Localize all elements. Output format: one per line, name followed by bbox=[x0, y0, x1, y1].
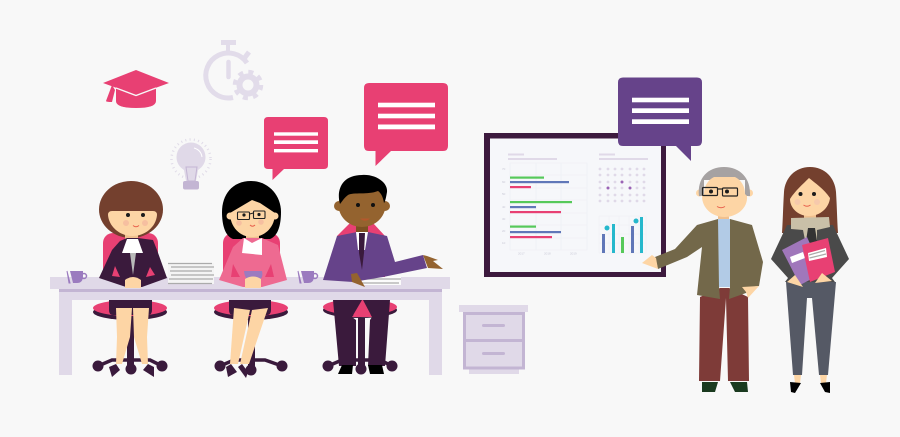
vertical bar chart bbox=[599, 216, 646, 253]
horizontal bar chart bbox=[502, 163, 587, 256]
icon: stopwatch with gear bbox=[206, 40, 261, 98]
filing cabinet bbox=[459, 305, 528, 374]
coffee cups and paper stacks on desk bbox=[67, 263, 401, 285]
horizontal bar chart: 30 bbox=[502, 217, 506, 221]
speech bubble: large pink bbox=[364, 83, 448, 166]
speech bubble: purple bbox=[618, 78, 702, 161]
lower body: man bbox=[333, 300, 390, 374]
figure: male presenter bbox=[642, 167, 763, 392]
speech bubble: small pink bbox=[264, 117, 328, 180]
figure: female colleague with books bbox=[771, 167, 849, 393]
chair: man bbox=[322, 223, 398, 374]
dot matrix bbox=[599, 168, 645, 202]
lower body: first woman bbox=[109, 300, 154, 377]
horizontal bar chart: 70 bbox=[502, 167, 506, 171]
icon: light bulb bbox=[172, 140, 210, 190]
icon: graduation cap bbox=[103, 70, 169, 108]
horizontal bar chart: 10 bbox=[502, 241, 506, 245]
figure: man upper body bbox=[323, 175, 443, 287]
horizontal bar chart: 2018 bbox=[544, 252, 551, 256]
horizontal bar chart: 40 bbox=[502, 205, 506, 209]
horizontal bar chart: 2017 bbox=[518, 252, 525, 256]
horizontal bar chart: 20 bbox=[502, 229, 506, 233]
desk bbox=[50, 277, 450, 375]
chart headings bbox=[508, 154, 648, 160]
figure: first woman upper body bbox=[99, 181, 167, 288]
chair: first woman bbox=[92, 233, 168, 374]
horizontal bar chart: 50 bbox=[502, 192, 506, 196]
horizontal bar chart: 2019 bbox=[570, 252, 577, 256]
horizontal bar chart: 60 bbox=[502, 180, 506, 184]
presentation board bbox=[484, 133, 666, 277]
lower body: second woman bbox=[226, 300, 271, 378]
figure: second woman upper body bbox=[219, 181, 287, 288]
chair: second woman bbox=[214, 233, 288, 376]
